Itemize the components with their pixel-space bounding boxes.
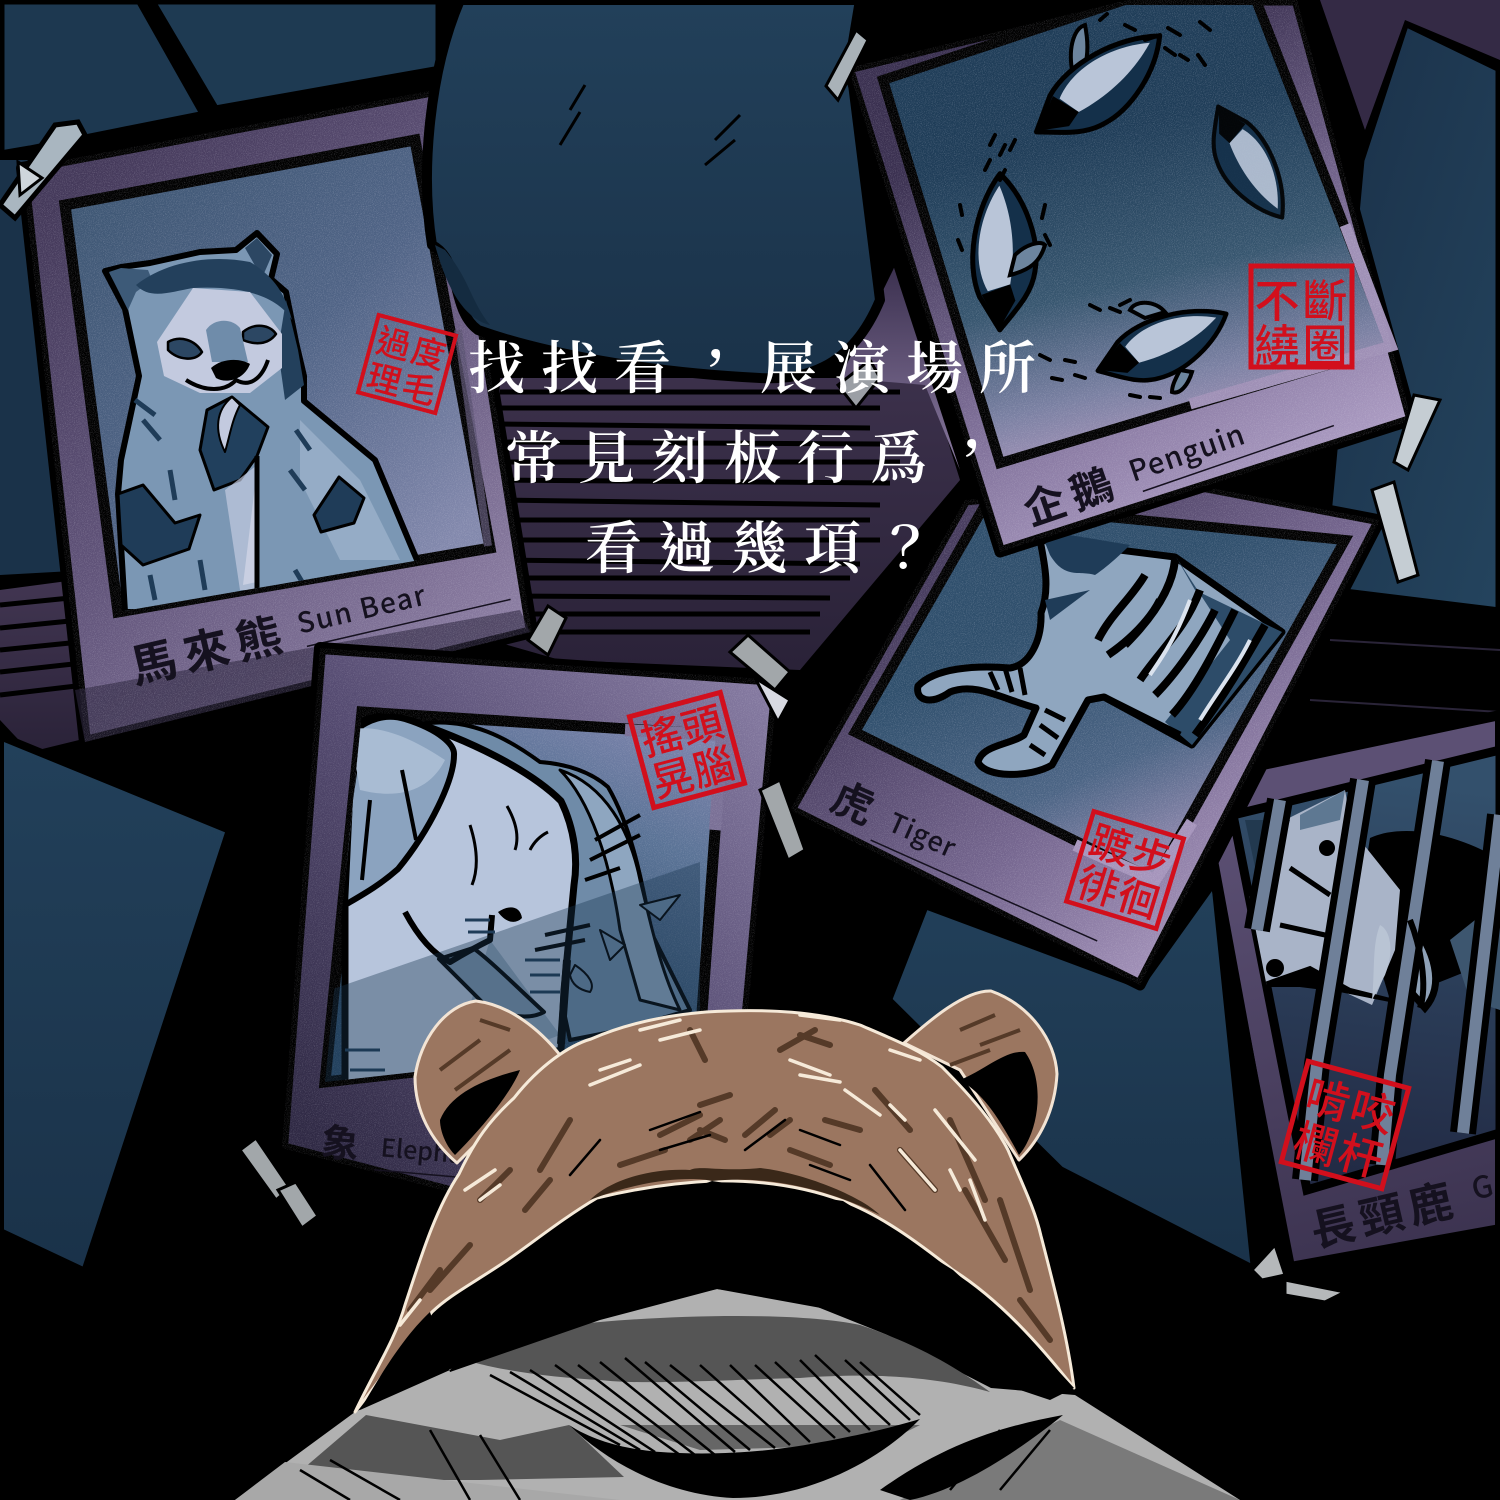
title: 找找看 — [468, 338, 687, 401]
stamp: 啃咬欄杆: 咬 — [1344, 1072, 1403, 1145]
stamp: 搖頭晃腦: 腦 — [685, 730, 740, 798]
stamp: 踱步徘徊: 徊 — [1111, 861, 1168, 930]
card label: tiger — [823, 764, 1122, 942]
tape: top left of bear card — [0, 122, 85, 218]
title: ， — [687, 331, 760, 394]
title: ， — [943, 421, 1016, 484]
stamp: 踱步徘徊: 徘 — [1071, 848, 1127, 918]
background blob top centre — [427, 0, 880, 378]
stamp: 過度理毛: 度 — [406, 323, 452, 379]
title — [468, 331, 1052, 581]
stamp: 踱步徘徊: 踱 — [1083, 807, 1140, 877]
tapes on cards — [240, 30, 1440, 1302]
stamp: 不斷繞圈: 圈 — [1302, 310, 1348, 375]
elephant in motion — [320, 715, 700, 1100]
tiger leg and body — [918, 530, 1282, 774]
card label: elephant — [319, 1111, 623, 1192]
left ear — [415, 1001, 560, 1163]
stamp: 不斷繞圈: 斷 — [1302, 265, 1348, 330]
stamp: 過度理毛: 理 — [362, 349, 408, 405]
stamp: 搖頭晃腦: 搖 — [633, 699, 688, 768]
stamp: 啃咬欄杆 — [1281, 1058, 1409, 1192]
card label: tiger: 虎 — [823, 764, 886, 837]
stamp: 啃咬欄杆: 欄 — [1287, 1105, 1346, 1178]
stamp: 過度理毛: 毛 — [397, 358, 442, 415]
card label: elephant: Elephant — [379, 1128, 490, 1174]
right ear — [904, 991, 1057, 1160]
title: 看過幾項？ — [585, 518, 950, 581]
title: 展演場所 — [760, 338, 1052, 401]
penguins circling — [958, 14, 1299, 398]
card label: tiger: Tiger — [883, 801, 964, 866]
card label: sun bear: Sun Bear — [293, 574, 430, 642]
title: 常見刻板行爲 — [505, 428, 943, 491]
stamp: 不斷繞圈 — [1251, 265, 1352, 375]
shelf stripes left — [0, 578, 120, 752]
stamp: 踱步徘徊 — [1065, 806, 1185, 932]
stamp: 不斷繞圈: 繞 — [1254, 310, 1300, 375]
card label: giraffe: 長頸鹿 — [1304, 1164, 1464, 1260]
stamp: 搖頭晃腦 — [628, 687, 745, 810]
stamp: 搖頭晃腦: 晃 — [644, 740, 699, 809]
giraffe head behind bars — [1245, 790, 1500, 1010]
polaroid: penguin — [848, 0, 1413, 552]
bear in photo — [105, 233, 430, 612]
stamp: 啃咬欄杆: 杆 — [1332, 1117, 1391, 1190]
card label: sun bear: 馬來熊 — [123, 597, 296, 698]
polaroid: elephant — [282, 648, 782, 1200]
stamp: 過度理毛: 過 — [372, 313, 417, 370]
stamp: 搖頭晃腦: 頭 — [674, 688, 729, 757]
card label: sun bear — [123, 547, 513, 698]
stamp: 踱步徘徊: 步 — [1123, 819, 1180, 889]
polaroid: giraffe — [1212, 715, 1500, 1267]
head fur — [355, 1011, 1074, 1412]
card label: penguin: 企鵝 — [1014, 449, 1127, 538]
stamp: 不斷繞圈: 不 — [1254, 265, 1300, 330]
sweater — [235, 1289, 1240, 1500]
light beam shadow — [320, 862, 700, 1100]
polaroid: tiger — [790, 480, 1380, 985]
card label: penguin — [1014, 376, 1337, 538]
card label: penguin: Penguin — [1123, 411, 1250, 490]
card label: elephant: 象 — [319, 1111, 362, 1169]
cage bars — [1257, 761, 1500, 1180]
back of visitor bear — [235, 991, 1240, 1500]
card label: giraffe: G — [1467, 1161, 1497, 1209]
stamp: 啃咬欄杆: 啃 — [1299, 1060, 1358, 1133]
stamp: 過度理毛 — [357, 312, 457, 416]
polaroid: sun bear — [0, 88, 535, 743]
striped shelf behind title — [0, 268, 1500, 712]
